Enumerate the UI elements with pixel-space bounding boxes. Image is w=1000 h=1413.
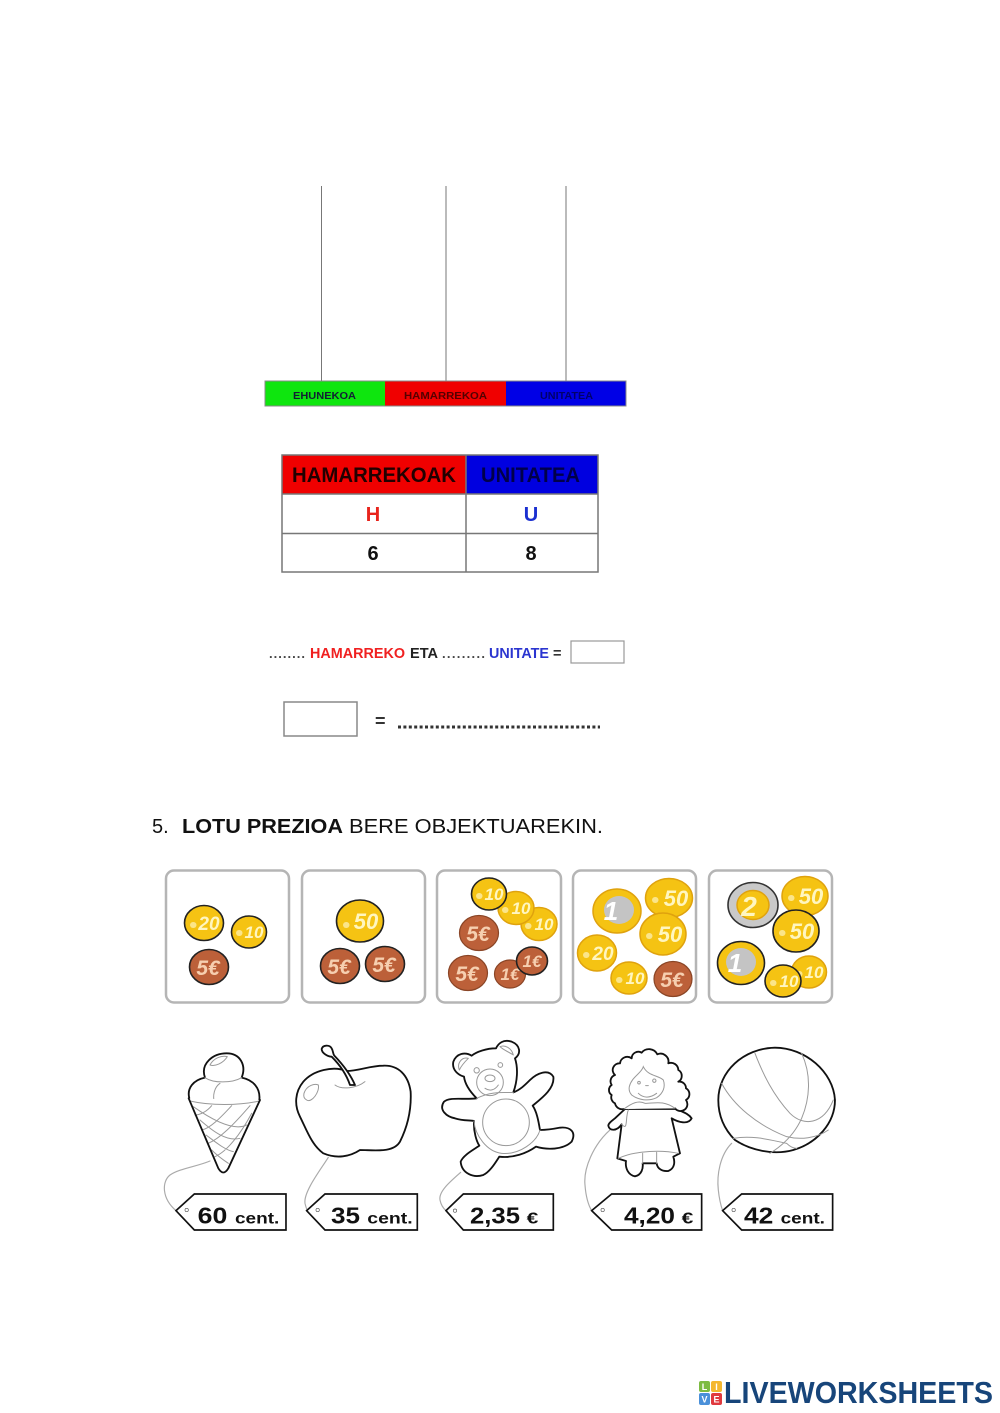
coin card 3: 10 (535, 915, 554, 934)
item: ball with 42 cent tag: cent. (781, 1210, 825, 1227)
coin card 4: 50 (658, 922, 683, 947)
item: teddy bear with 2,35 euro tag (440, 1041, 573, 1230)
sentence: tens and units equals: = (553, 646, 561, 662)
item: teddy bear with 2,35 euro tag: 2,35 (470, 1202, 520, 1228)
coin card 4: 20 (591, 944, 614, 965)
coin card 5: 1 (728, 948, 742, 978)
answer box with dotted line: = (375, 711, 386, 731)
item: ice cream with 60 cent tag: cent. (235, 1210, 279, 1227)
item: doll with 4,20 euro tag: 4,20 (624, 1202, 675, 1228)
coin card 1: 20 (197, 914, 220, 935)
sentence: tens and units equals: ......... (442, 646, 485, 661)
logo: Liveworksheets: E (713, 1394, 720, 1404)
answer box with dotted line (284, 702, 600, 736)
heading: exercise 5: 5. (152, 816, 169, 838)
coin card 5: 10 (780, 972, 799, 991)
place value table (282, 455, 598, 572)
item: ice cream with 60 cent tag (164, 1053, 286, 1230)
sentence: tens and units equals: HAMARREKO (310, 646, 405, 662)
coin card 3: 5€ (466, 923, 491, 946)
item: ice cream with 60 cent tag: 60 (198, 1202, 227, 1228)
coin card 3: 1€ (501, 965, 521, 984)
coin card 1: 10 (245, 923, 264, 942)
logo: Liveworksheets: I (715, 1382, 718, 1392)
coin card 4: 50 (664, 886, 689, 911)
item: apple with 35 cent tag: 35 (331, 1202, 360, 1228)
coin card 2 (302, 870, 425, 1002)
place value table: UNITATEA (481, 464, 580, 487)
abacus: place value chart: UNITATEA (540, 391, 593, 402)
place value table: 6 (367, 543, 379, 565)
item: apple with 35 cent tag: cent. (367, 1210, 413, 1227)
coin card 3 (437, 870, 561, 1002)
coin card 5: 50 (799, 884, 824, 909)
sentence: tens and units equals (269, 641, 624, 663)
abacus: place value chart: HAMARREKOA (404, 390, 487, 402)
coin card 5: 10 (805, 963, 824, 982)
coin card 5: 50 (790, 919, 815, 944)
coin card 2: 5€ (327, 956, 352, 979)
coin card 4: 10 (626, 969, 645, 988)
place value table: U (524, 504, 538, 526)
coin card 5: 2 (740, 891, 757, 922)
coin card 3: 10 (512, 899, 531, 918)
item: doll with 4,20 euro tag: € (682, 1210, 694, 1227)
heading: exercise 5: BERE OBJEKTUAREKIN. (349, 816, 603, 838)
heading: exercise 5: LOTU PREZIOA (182, 816, 343, 838)
coin card 2: 5€ (372, 954, 397, 977)
coin card 3: 1€ (523, 952, 543, 971)
place value table: H (366, 504, 380, 526)
item: ball with 42 cent tag: 42 (744, 1202, 773, 1228)
coin card 3: 10 (485, 885, 504, 904)
sentence: tens and units equals: ETA (410, 646, 439, 662)
coin card 3: 5€ (455, 963, 480, 986)
item: apple with 35 cent tag (296, 1046, 417, 1230)
coin card 5 (709, 870, 832, 1002)
item: ball with 42 cent tag (718, 1048, 835, 1230)
abacus: place value chart (265, 186, 626, 406)
coin card 1 (166, 870, 289, 1002)
sentence: tens and units equals: UNITATE (489, 646, 549, 662)
abacus: place value chart: EHUNEKOA (293, 390, 356, 402)
logo: Liveworksheets: L (702, 1382, 708, 1392)
place value table: HAMARREKOAK (292, 464, 456, 487)
coin card 4: 1 (604, 896, 618, 926)
coin card 1: 5€ (196, 957, 221, 980)
place value table: 8 (525, 543, 537, 565)
coin card 4: 5€ (660, 969, 685, 992)
item: teddy bear with 2,35 euro tag: € (527, 1210, 539, 1227)
logo: Liveworksheets: V (701, 1394, 708, 1404)
coin card 2: 50 (354, 909, 379, 934)
sentence: tens and units equals: ........ (269, 646, 305, 661)
coin card 4 (573, 870, 696, 1002)
heading: exercise 5 (152, 816, 603, 838)
item: doll with 4,20 euro tag (585, 1049, 702, 1230)
